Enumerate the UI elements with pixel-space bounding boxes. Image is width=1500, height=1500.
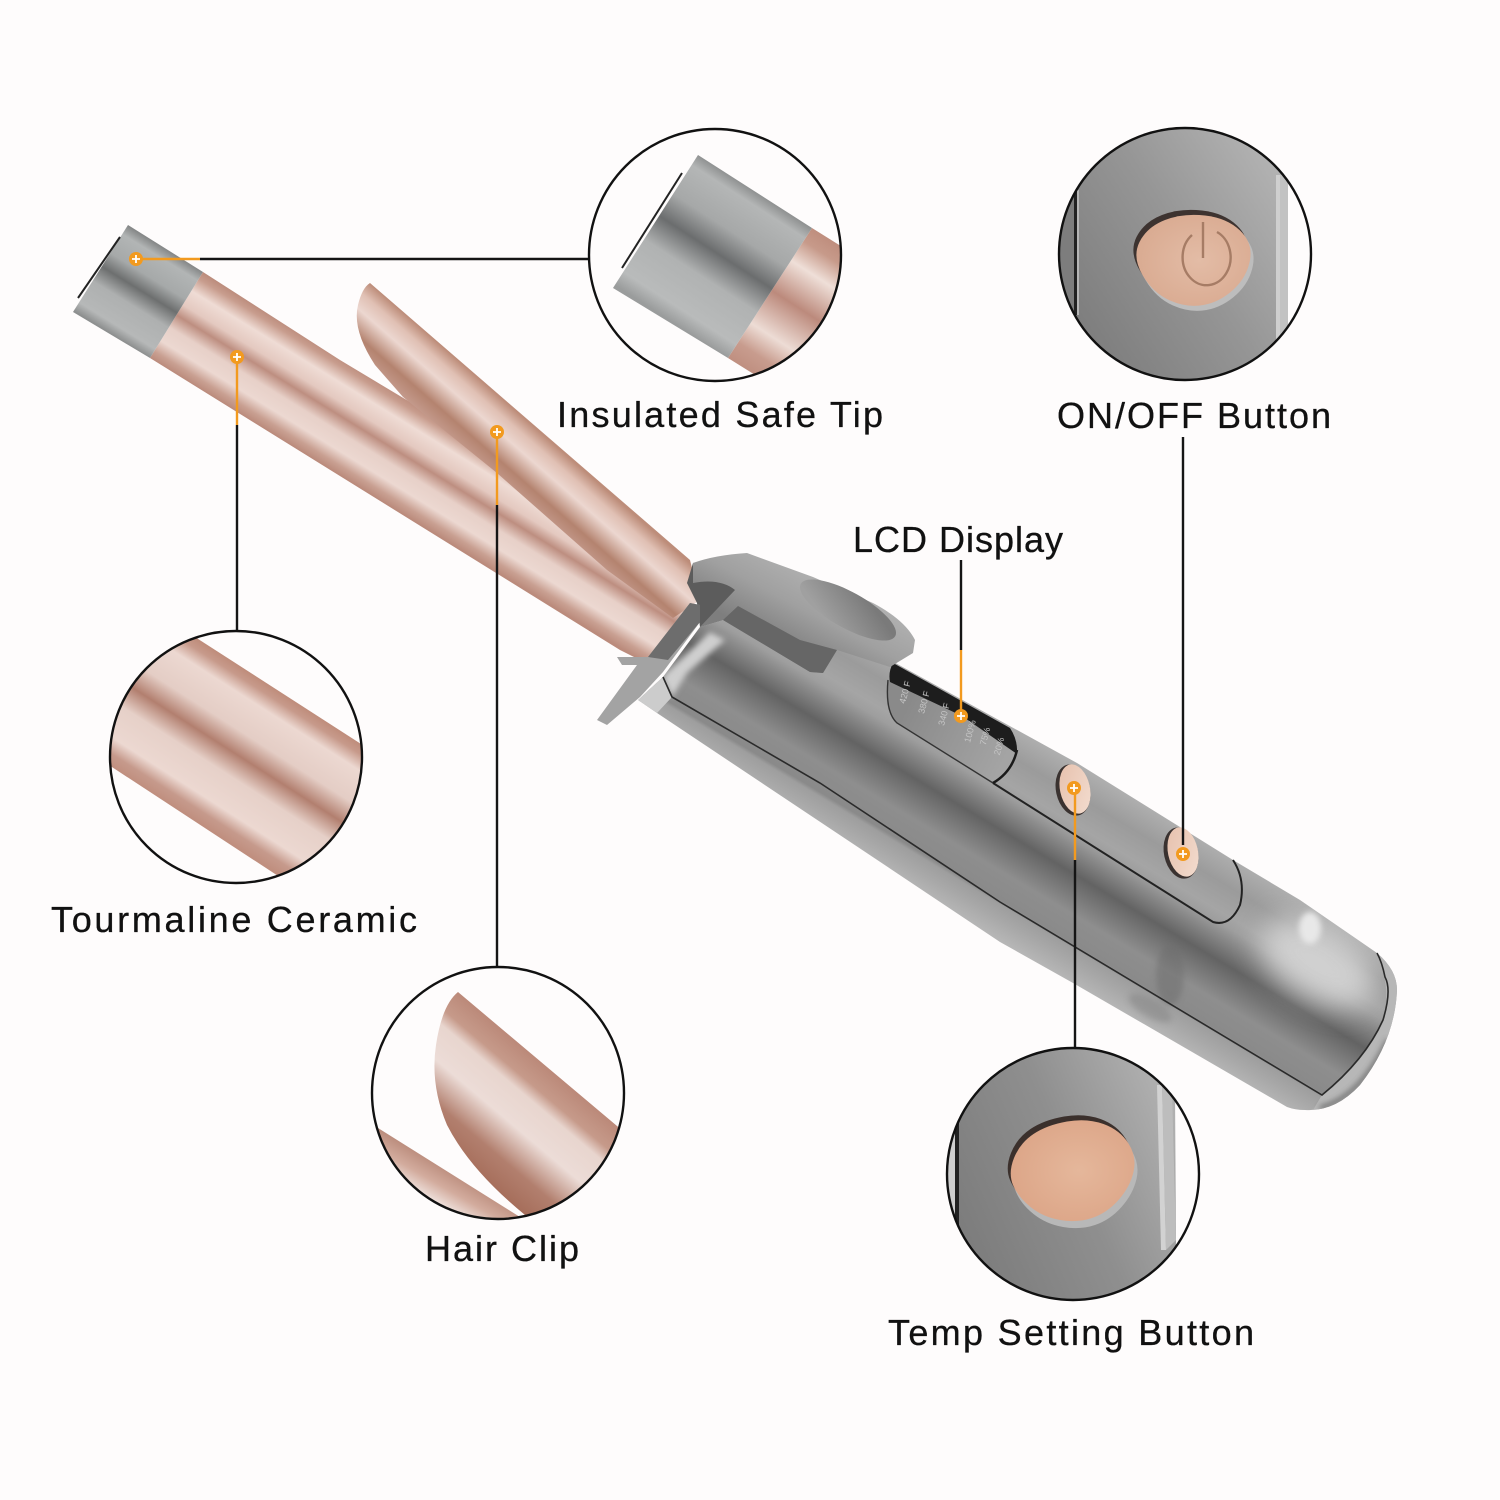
control panel outline — [993, 783, 1242, 923]
hair clip arm — [357, 283, 700, 618]
LCD display: 420 F — [897, 679, 913, 705]
temp setting button on handle — [1051, 761, 1095, 819]
label: Hair Clip: Hair Clip — [425, 1228, 579, 1269]
marker dots — [129, 252, 1190, 861]
panel: temp setting button detail — [940, 1048, 1210, 1310]
barrel — [150, 272, 700, 670]
clip lever — [693, 553, 915, 673]
LCD display: 100% — [962, 719, 978, 744]
LCD display: 75% — [978, 726, 992, 746]
panel: on/off button detail — [1058, 126, 1312, 382]
panel: hair clip detail — [370, 966, 626, 1220]
label: Temp Setting Button: Temp Setting Button — [888, 1312, 1254, 1353]
LCD display: 380 F — [916, 689, 932, 715]
panel: tourmaline ceramic detail — [108, 630, 364, 884]
curling iron product — [73, 225, 1410, 1115]
on/off button on handle — [1159, 824, 1203, 882]
label: LCD Display: LCD Display — [853, 519, 1063, 560]
label: ON/OFF Button: ON/OFF Button — [1057, 395, 1331, 436]
clip collar and flange — [597, 556, 745, 725]
panel: insulated safe tip detail — [588, 128, 842, 382]
LCD display — [887, 663, 1017, 783]
label: Tourmaline Ceramic: Tourmaline Ceramic — [51, 899, 417, 940]
label: Insulated Safe Tip: Insulated Safe Tip — [557, 394, 883, 435]
LCD display: 340 F — [936, 701, 952, 727]
LCD display: 20% — [992, 736, 1006, 756]
handle body — [638, 620, 1410, 1115]
icon: power symbol — [1183, 222, 1231, 285]
insulated tip — [73, 225, 203, 358]
callout lines — [136, 259, 1183, 1050]
